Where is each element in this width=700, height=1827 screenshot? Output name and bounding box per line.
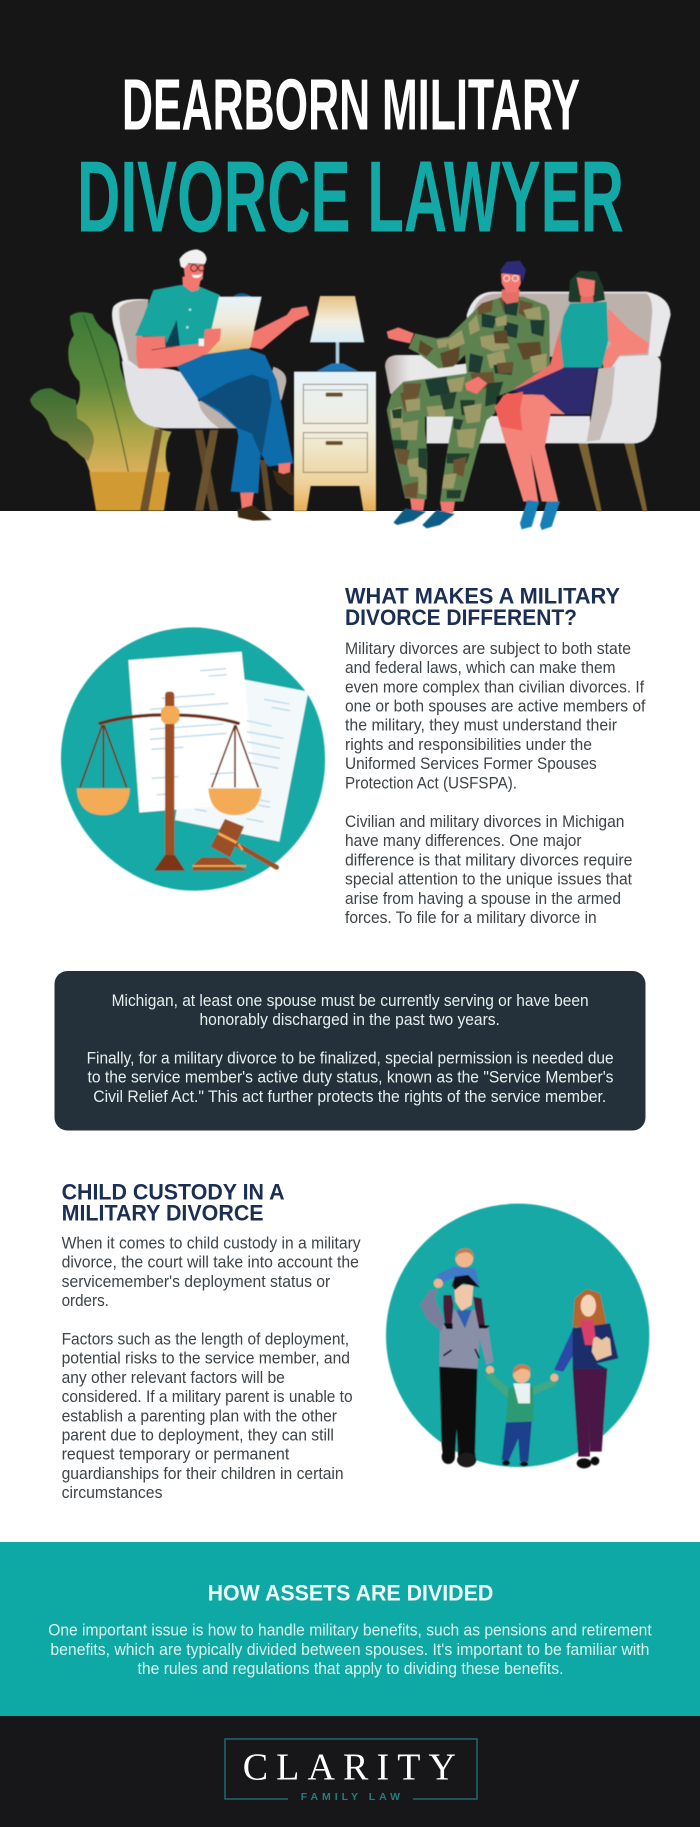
panel: how assets are divided: HOW ASSETS ARE DIVIDED — [208, 1581, 493, 1606]
body text: orders. — [62, 1292, 109, 1310]
boy in green — [488, 1364, 558, 1466]
heading: child custody: CHILD CUSTODY IN A — [62, 1179, 285, 1204]
body text: Civilian and military divorces in Michigan — [345, 813, 624, 831]
lawyer figure — [135, 249, 309, 521]
panel: dark callout: honorably discharged in the past two years. — [200, 1011, 500, 1029]
body text: request temporary or permanent — [62, 1446, 290, 1464]
body text: When it comes to child custody in a military — [62, 1234, 361, 1252]
panel: dark callout: to the service member's active duty status, known as the "Service Member's — [88, 1069, 614, 1087]
mother with small dog — [554, 1289, 618, 1468]
body text: guardianships for their children in certain — [62, 1465, 344, 1483]
father with child on shoulders — [420, 1248, 494, 1467]
body text: the military, they must understand their — [345, 717, 617, 735]
body text: servicemember's deployment status or — [62, 1273, 331, 1291]
body text: have many differences. One major — [345, 832, 582, 850]
body text: difference is that military divorces require — [345, 851, 632, 869]
body text: establish a parenting plan with the other — [62, 1407, 337, 1425]
panel: dark callout: Michigan, at least one spouse must be currently serving or have been — [112, 992, 589, 1010]
body text: potential risks to the service member, and — [62, 1350, 350, 1368]
documents — [128, 652, 308, 842]
section: child custody in a military divorce — [62, 1179, 649, 1502]
body text — [345, 640, 646, 927]
gavel — [192, 819, 277, 871]
panel: how assets are divided: the rules and regulations that apply to dividing these benefits. — [138, 1660, 564, 1678]
section: what makes a military divorce different — [61, 583, 646, 927]
body text: considered. If a military parent is unable to — [62, 1388, 353, 1406]
balance scale — [77, 692, 262, 871]
panel: how assets are divided: One important issue is how to handle military benefits, such as pensions and retirement — [48, 1622, 652, 1640]
panel: dark callout — [54, 971, 646, 1130]
table lamp — [310, 296, 364, 371]
footer background — [0, 1716, 700, 1827]
heading: what makes a military divorce different — [345, 583, 620, 630]
body text: one or both spouses are active members of — [345, 698, 646, 716]
logo: Clarity Family Law: CLARITY — [243, 1746, 456, 1788]
illustration: scales of justice and documents — [61, 627, 325, 891]
panel: dark callout: Civil Relief Act." This act further protects the rights of the service member. — [93, 1088, 606, 1106]
panel: how assets are divided: benefits, which are typically divided between spouses. It's important to be familiar with — [50, 1641, 649, 1659]
body text: arise from having a spouse in the armed — [345, 890, 621, 908]
body text: and federal laws, which can make them — [345, 659, 616, 677]
panel: how assets are divided — [0, 1542, 700, 1716]
nightstand — [294, 372, 376, 511]
panel: dark callout: Finally, for a military divorce to be finalized, special permission is needed due — [87, 1049, 614, 1067]
title — [77, 66, 624, 254]
body text: rights and responsibilities under the — [345, 736, 592, 754]
illustration: family — [386, 1204, 649, 1468]
body text: even more complex than civilian divorces. If — [345, 678, 644, 696]
body text: circumstances — [62, 1484, 162, 1502]
logo: Clarity Family Law: FAMILY LAW — [301, 1791, 400, 1803]
body text: Factors such as the length of deployment, — [62, 1330, 349, 1348]
sofa — [385, 292, 671, 511]
armchair — [112, 299, 286, 511]
illustration: lawyer, plant and armchair — [30, 249, 309, 521]
body text: divorce, the court will take into account the — [62, 1254, 359, 1272]
illustration: lamp, nightstand, couple on sofa — [294, 261, 671, 530]
body text: any other relevant factors will be — [62, 1369, 285, 1387]
logo: Clarity Family Law — [225, 1739, 477, 1803]
body text: Military divorces are subject to both state — [345, 640, 631, 658]
body text: special attention to the unique issues that — [345, 870, 632, 888]
teal circle — [61, 627, 325, 891]
body text: Protection Act (USFSPA). — [345, 774, 517, 792]
body text — [62, 1234, 361, 1502]
body text: Uniformed Services Former Spouses — [345, 755, 597, 773]
heading: child custody — [62, 1179, 285, 1226]
heading: child custody: MILITARY DIVORCE — [62, 1201, 264, 1226]
soldier figure — [383, 261, 553, 528]
heading: what makes a military divorce different: DIVORCE DIFFERENT? — [345, 605, 577, 630]
teal circle — [386, 1204, 649, 1467]
body text: parent due to deployment, they can still — [62, 1426, 334, 1444]
woman figure — [495, 271, 649, 530]
heading: what makes a military divorce different: WHAT MAKES A MILITARY — [345, 583, 620, 608]
plant — [30, 312, 172, 511]
header background — [0, 0, 700, 511]
body text: forces. To file for a military divorce in — [345, 909, 597, 927]
